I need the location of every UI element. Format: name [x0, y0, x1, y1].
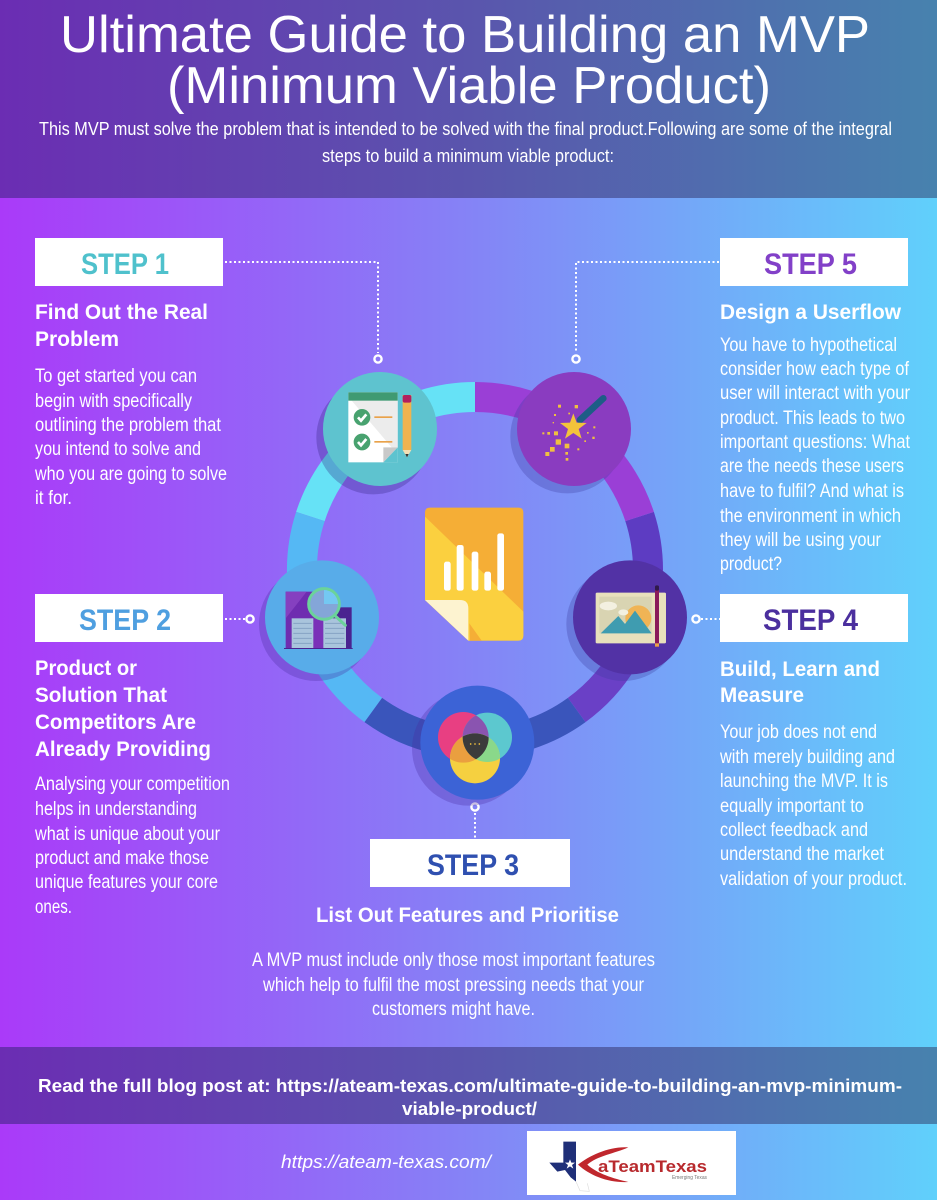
step 4 label: [720, 594, 908, 642]
step 1 text: you intend to solve and: [35, 439, 201, 460]
step 4 text: validation of your product.: [720, 869, 907, 890]
step 5 text: they will be using your: [720, 530, 882, 551]
step 4 heading: Measure: [720, 684, 804, 707]
icon: books and magnifier: [259, 560, 379, 681]
step 2 heading: Already Providing: [35, 738, 211, 761]
intro text: steps to build a minimum viable product:: [322, 146, 614, 166]
step 2 heading: Solution That: [35, 684, 167, 707]
header band: [0, 0, 937, 198]
panel: step 4: [719, 594, 908, 890]
step 2 text: helps in understanding: [35, 799, 197, 820]
step 5 text: the environment in which: [720, 506, 901, 527]
panel: step 5: [720, 238, 911, 575]
icon: magic wand: [510, 372, 631, 493]
step 1 text: outlining the problem that: [35, 415, 222, 436]
step 5 text: You have to hypothetical: [720, 335, 897, 356]
step 5 text: important questions: What: [720, 432, 911, 453]
step 4 text: collect feedback and: [720, 820, 868, 841]
step 1 heading: [35, 301, 208, 351]
step 5 text: consider how each type of: [720, 359, 910, 380]
step 4 text: equally important to: [720, 796, 864, 817]
logo tagline: Emerging Texas: [672, 1175, 707, 1181]
icon: checklist: [316, 372, 437, 494]
intro text: [39, 119, 892, 166]
step 3 text: A MVP must include only those most important features: [252, 950, 655, 971]
title: (Minimum Viable Product): [167, 57, 771, 115]
step 1 heading: Problem: [35, 328, 119, 351]
icon: chart document: [425, 508, 523, 641]
step 5 text: have to fulfil? And what is: [720, 481, 904, 502]
step 4 text: launching the MVP. It is: [720, 771, 888, 792]
website url: https://ateam-texas.com/: [281, 1152, 493, 1172]
step 1 text: who you are going to solve: [34, 464, 227, 485]
step 4 text: [719, 722, 907, 890]
panel: step 3: [252, 839, 655, 1020]
step 2 heading: Product or: [35, 657, 137, 680]
step 3 label: [370, 839, 570, 887]
step 4 text: Your job does not end: [720, 722, 877, 743]
step 1 text: To get started you can: [35, 366, 197, 387]
step 1 text: begin with specifically: [35, 391, 192, 412]
step 4 heading: Build, Learn and: [720, 658, 880, 681]
icon: red swoosh: [578, 1147, 628, 1182]
step 1 label: STEP 1: [81, 248, 169, 281]
step 3 text: which help to fulfil the most pressing needs that your: [262, 975, 645, 996]
blog post link: [38, 1076, 902, 1119]
panel: step 1: [34, 238, 227, 509]
step 3 text: [252, 950, 655, 1020]
ring diagram: [259, 372, 687, 806]
footer band: [0, 1047, 937, 1124]
step 3 label: STEP 3: [427, 849, 519, 882]
logo: [527, 1131, 736, 1195]
step 3 text: customers might have.: [372, 999, 535, 1020]
blog post link: viable-product/: [402, 1099, 537, 1119]
step 4 text: understand the market: [720, 844, 885, 865]
step 5 label: STEP 5: [764, 248, 857, 281]
step 2 text: Analysing your competition: [35, 774, 230, 795]
connectors: [225, 262, 720, 838]
step 2 text: unique features your core: [35, 872, 218, 893]
step 2 text: [34, 774, 230, 918]
icon: Texas map: [549, 1142, 576, 1182]
step 2 heading: Competitors Are: [35, 711, 196, 734]
step 5 label: [720, 238, 908, 286]
step 3 heading: List Out Features and Prioritise: [316, 904, 619, 927]
icon: venn diagram: [412, 686, 534, 806]
step 2 text: what is unique about your: [34, 824, 221, 845]
step 2 text: ones.: [35, 897, 72, 918]
step 2 text: product and make those: [35, 848, 209, 869]
step 1 heading: Find Out the Real: [35, 301, 208, 324]
title: [60, 6, 870, 115]
panel: step 2: [34, 594, 230, 918]
step 2 label: [35, 594, 223, 642]
step 4 heading: [720, 658, 880, 707]
step 1 text: it for.: [35, 488, 72, 509]
step 4 text: with merely building and: [719, 747, 895, 768]
step 1 label: [35, 238, 223, 286]
step 5 text: product. This leads to two: [720, 408, 905, 429]
icon: picture and pen: [566, 560, 687, 681]
step 5 text: are the needs these users: [720, 456, 904, 477]
step 5 heading: Design a Userflow: [720, 301, 902, 324]
step 5 text: product?: [720, 554, 782, 575]
step 5 text: user will interact with your: [720, 383, 911, 404]
step 4 label: STEP 4: [763, 604, 858, 637]
step 2 heading: [35, 657, 211, 761]
logo wordmark: aTeamTexas: [598, 1157, 707, 1176]
blog post link: Read the full blog post at: https://ateam-texas.com/ultimate-guide-to-building-an-mvp-minimum-: [38, 1076, 902, 1096]
step 2 label: STEP 2: [79, 604, 171, 637]
step 5 text: [720, 335, 911, 575]
step 1 text: [34, 366, 227, 509]
title: Ultimate Guide to Building an MVP: [60, 6, 870, 64]
